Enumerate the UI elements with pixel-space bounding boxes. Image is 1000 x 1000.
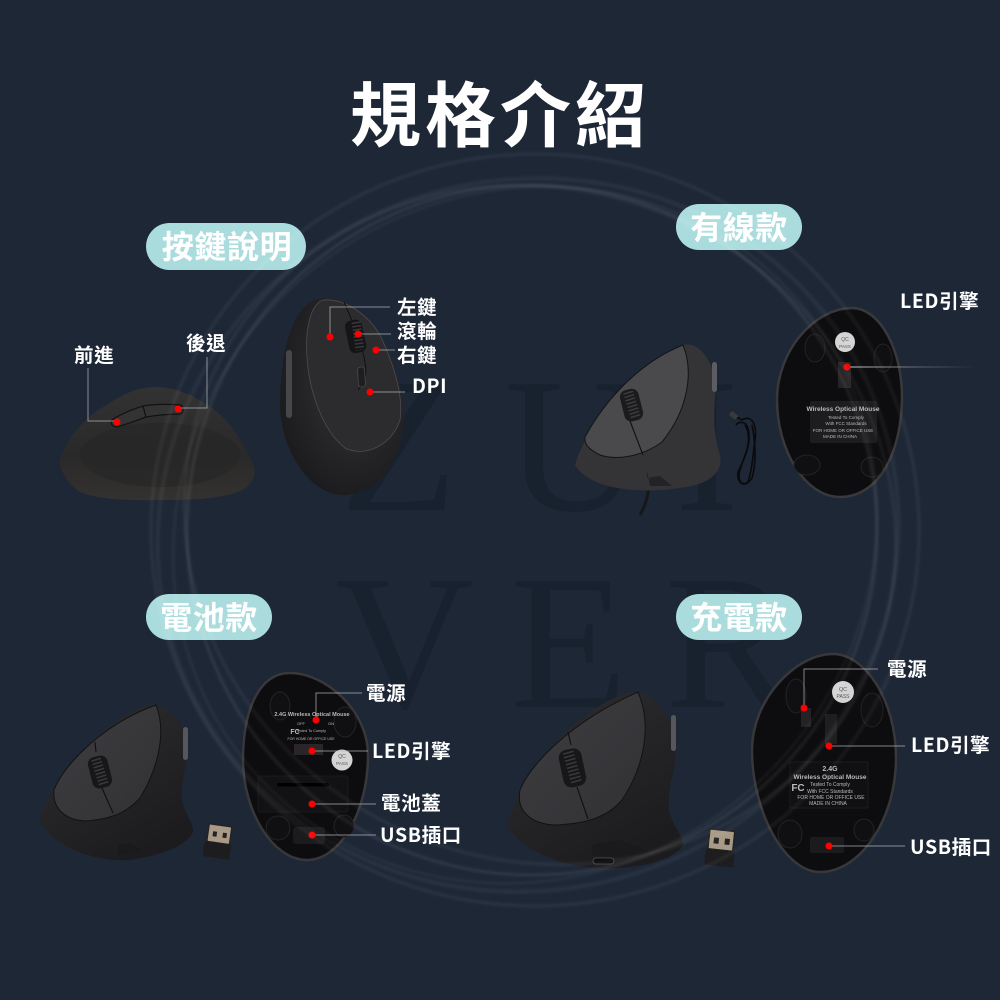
mouse: rechargeable underside: PASS	[837, 694, 850, 700]
mouse: top view	[280, 298, 403, 495]
callout: scroll wheel	[354, 315, 437, 344]
watermark lettering: R	[665, 536, 793, 749]
callout: LED engine: LED引擎	[900, 285, 979, 314]
icon: USB dongle	[203, 823, 234, 860]
mouse: rechargeable underside: With FCC Standards	[807, 789, 853, 795]
callout: back	[174, 327, 226, 412]
mouse: battery underside: FC	[290, 729, 300, 736]
mouse: wired underside	[777, 308, 902, 497]
callout: DPI: DPI	[412, 370, 447, 399]
callout: DPI	[366, 370, 447, 399]
watermark lettering: V	[335, 536, 474, 749]
mouse: rechargeable underside: Wireless Optical Mouse	[794, 774, 867, 781]
callout: scroll wheel: 滾輪	[397, 315, 437, 344]
pill heading: button guide: 按鍵說明	[162, 222, 292, 268]
mouse: battery underside: ON	[328, 721, 334, 726]
panel: button guide	[60, 291, 447, 500]
pill heading: rechargeable model: 充電款	[690, 593, 788, 639]
callout: LED engine	[826, 729, 990, 758]
mouse: wired underside: Tested To Comply	[828, 415, 865, 420]
callout: right button: 右鍵	[397, 339, 437, 368]
mouse: rechargeable side view	[507, 692, 683, 868]
callout: USB slot: USB插口	[910, 831, 992, 860]
callout: LED engine	[308, 735, 451, 764]
icon: USB cable	[729, 411, 755, 484]
mouse: front view with side buttons	[60, 387, 255, 500]
callout: battery cover: 電池蓋	[381, 787, 441, 816]
panel: battery model	[40, 673, 462, 860]
panel: wired model	[575, 285, 979, 515]
callout: LED engine	[844, 285, 979, 370]
mouse: battery underside: 2.4G Wireless Optical Mouse	[274, 712, 350, 718]
callout: right button	[372, 339, 437, 368]
watermark lettering	[335, 339, 793, 749]
mouse: rechargeable underside: FC	[791, 783, 805, 794]
callout: forward: 前進	[74, 339, 114, 368]
mouse: rechargeable underside: QC	[839, 687, 847, 693]
mouse: wired underside: With FCC Standards	[825, 421, 867, 426]
mouse: wired underside: FOR HOME OR OFFICE USE	[813, 428, 873, 433]
pill heading: wired model: 有線款	[690, 203, 788, 249]
mouse: rechargeable underside: Tested To Comply	[810, 782, 850, 788]
callout: power switch: 電源	[887, 653, 927, 682]
title: 規格介紹	[350, 60, 650, 162]
mouse: battery underside	[243, 673, 368, 860]
callout: left button: 左鍵	[397, 291, 437, 320]
mouse: rechargeable underside: FOR HOME OR OFFICE USE	[797, 795, 865, 801]
mouse: wired side view	[575, 344, 721, 515]
callout: forward	[74, 339, 120, 426]
callout: LED engine: LED引擎	[911, 729, 990, 758]
callout: LED engine: LED引擎	[372, 735, 451, 764]
callout: power switch	[312, 677, 406, 724]
watermark lettering: I	[675, 339, 739, 552]
mouse: wired underside: Wireless Optical Mouse	[807, 406, 880, 413]
mouse: battery underside: FOR HOME OR OFFICE USE	[287, 737, 335, 741]
callout: power switch: 電源	[366, 677, 406, 706]
mouse: battery side view	[40, 705, 193, 860]
panel: rechargeable model	[507, 653, 992, 872]
callout: power switch	[800, 653, 927, 712]
mouse: battery underside: OFF	[297, 721, 306, 726]
callout: left button	[326, 291, 437, 340]
mouse: rechargeable underside: MADE IN CHINA	[809, 801, 848, 807]
callout: USB slot	[308, 819, 462, 848]
mouse: wired underside: QC	[841, 337, 849, 343]
icon: USB dongle	[704, 829, 737, 867]
mouse: rechargeable underside	[752, 654, 896, 872]
watermark lettering: Z	[340, 339, 457, 552]
pill heading: battery model: 電池款	[160, 593, 258, 639]
callout: USB slot	[826, 831, 992, 860]
callout: USB slot: USB插口	[380, 819, 462, 848]
mouse: battery underside: QC	[338, 754, 346, 760]
watermark lettering: U	[505, 339, 644, 552]
mouse: wired underside: MADE IN CHINA	[823, 434, 857, 439]
mouse: wired underside: PASS	[839, 344, 851, 349]
watermark lettering: E	[510, 536, 627, 749]
callout: battery cover	[308, 787, 441, 816]
callout: back: 後退	[186, 327, 226, 356]
mouse: battery underside: PASS	[336, 761, 348, 766]
mouse: battery underside: Tested To Comply	[296, 729, 326, 733]
mouse: rechargeable underside: 2.4G	[822, 766, 838, 773]
